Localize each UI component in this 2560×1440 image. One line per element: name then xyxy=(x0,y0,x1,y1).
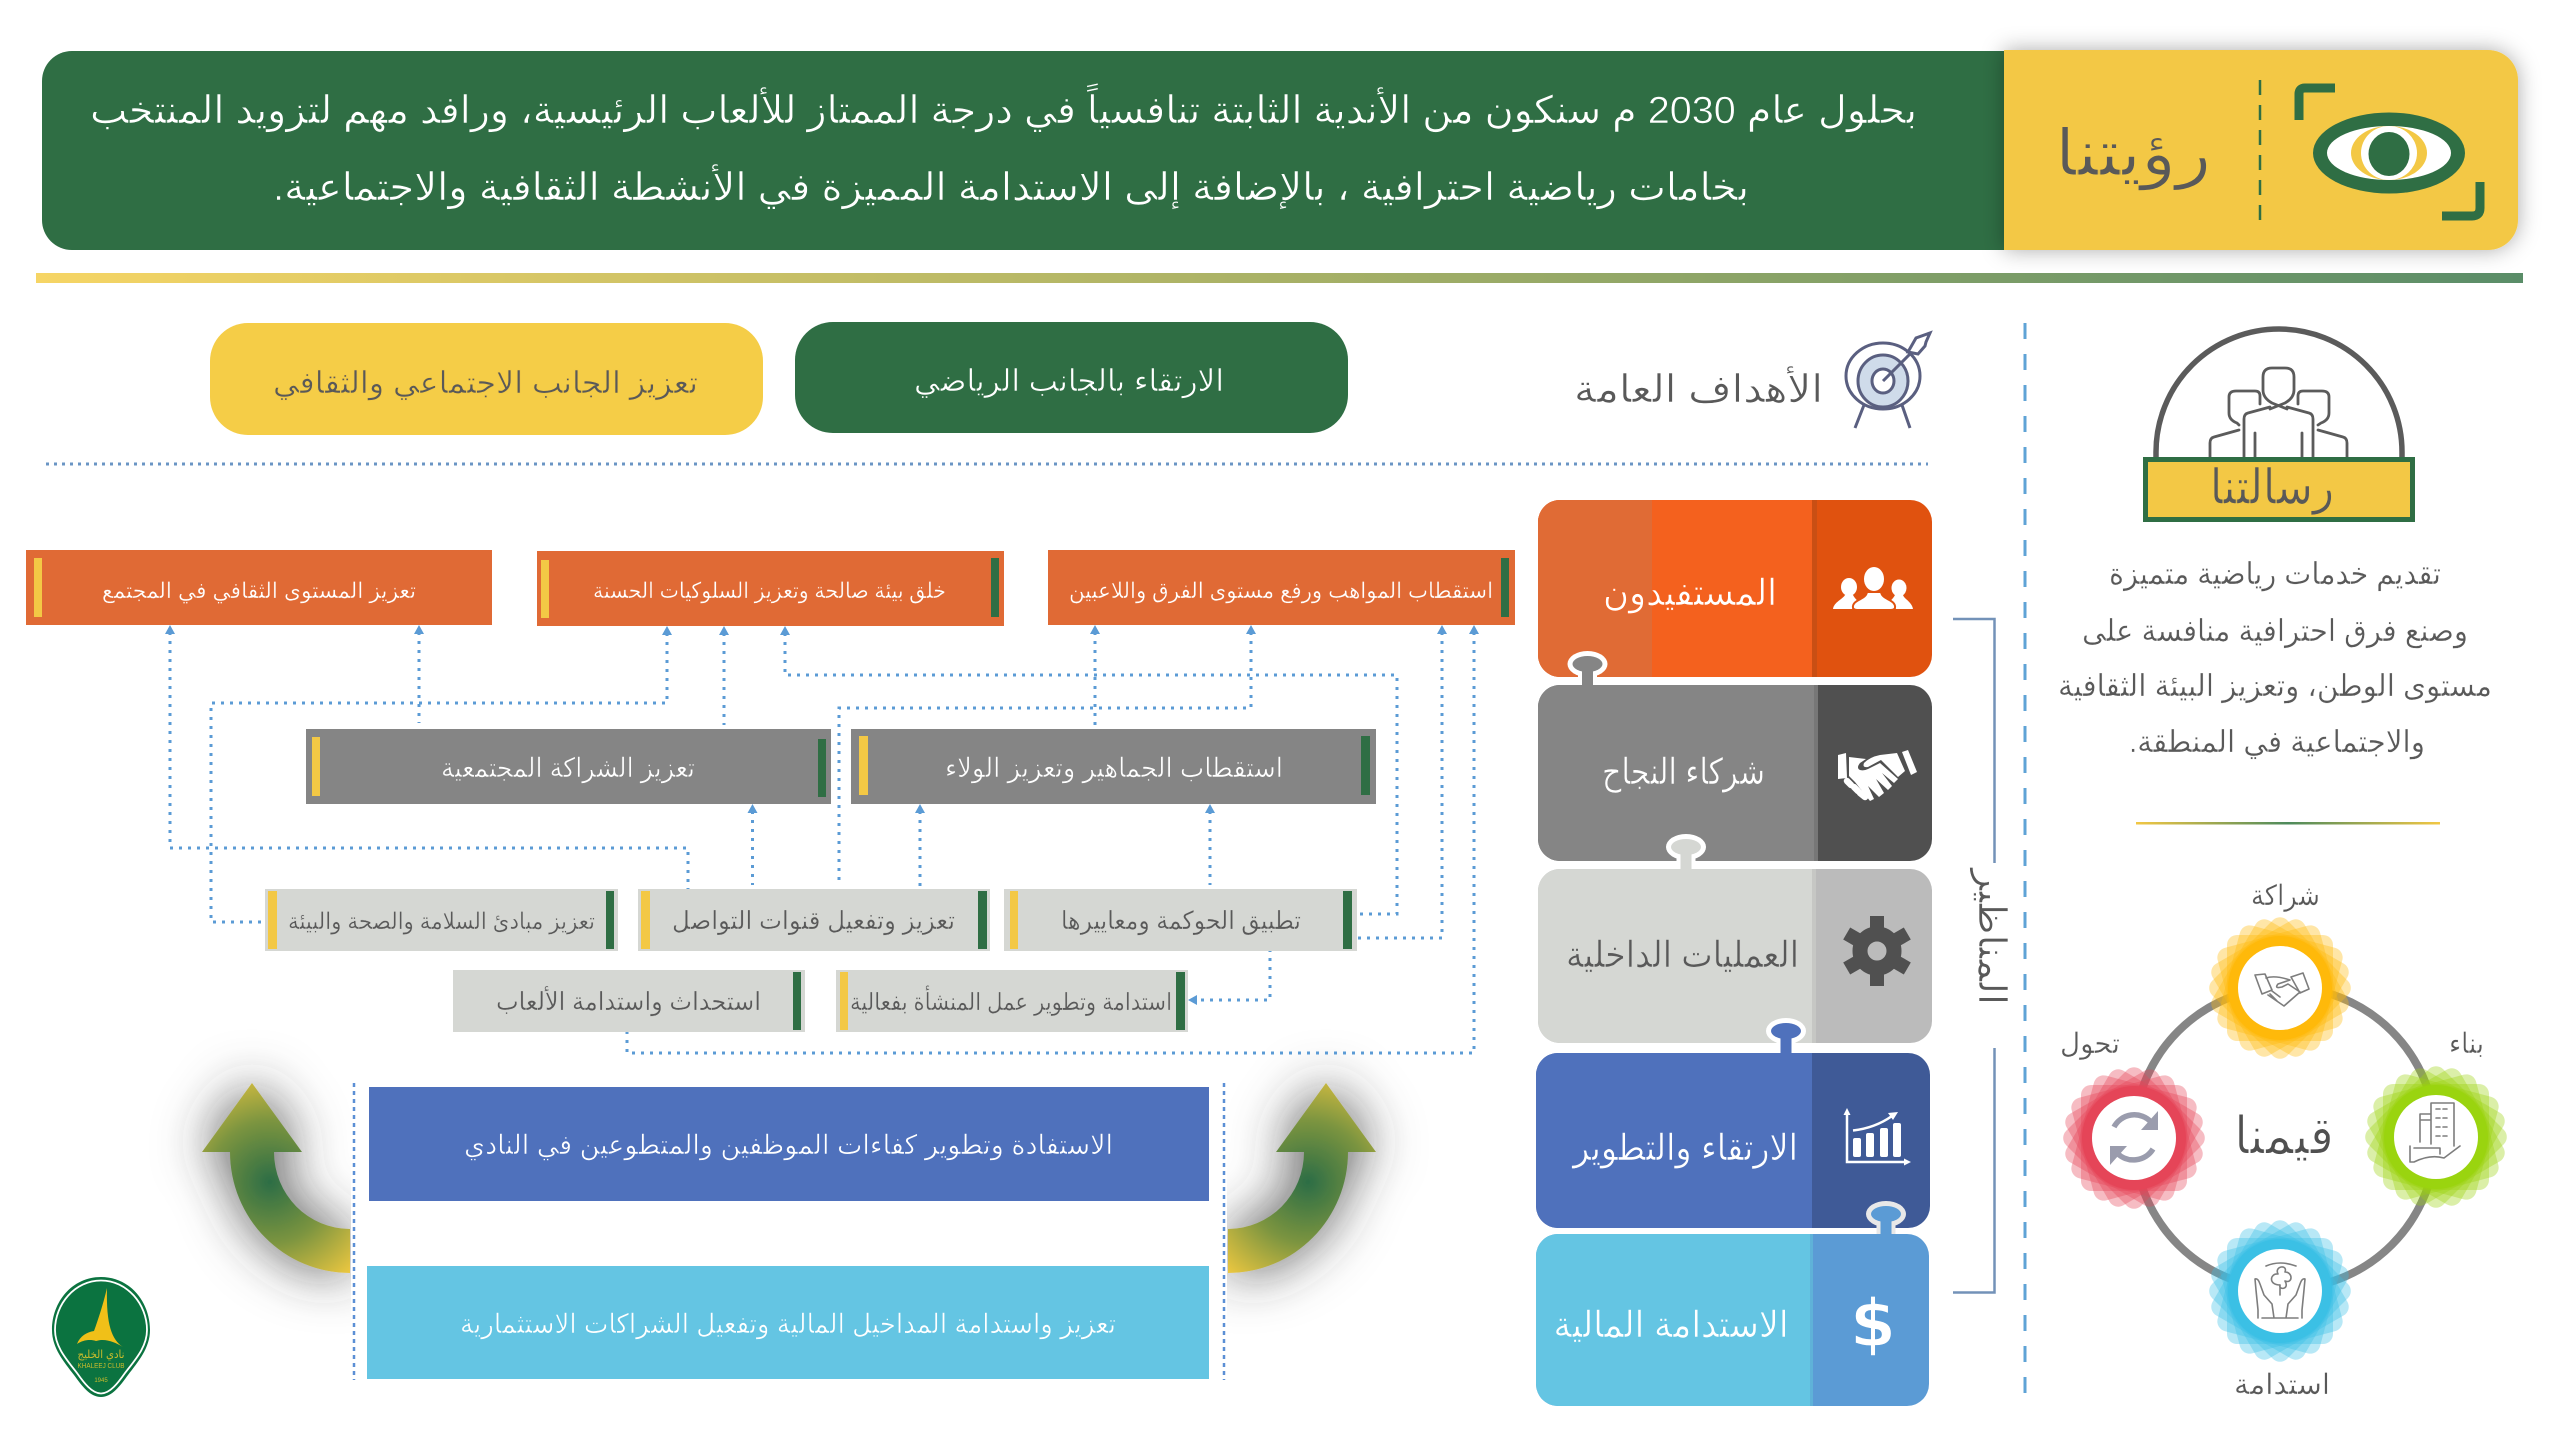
panel: general goals xyxy=(46,322,1930,464)
panel: strategic objectives xyxy=(26,550,1515,1032)
mission heading box xyxy=(2146,460,2412,520)
logo: Khaleej club: 1945 xyxy=(94,1378,108,1384)
vision statement text: بحلول عام 2030 م سنكون من الأندية الثابتة تنافسياً في درجة الممتاز للألعاب الرئيسية، ورافد مهم لتزويد المنتخب xyxy=(90,83,1917,133)
logo: Khaleej club: KHALEEJ CLUB xyxy=(78,1361,124,1370)
objective: safety: تعزيز مبادئ السلامة والصحة والبيئة xyxy=(288,908,595,935)
icon: bar chart xyxy=(1844,1108,1911,1166)
goals heading: الأهداف العامة xyxy=(1574,365,1823,411)
gradient divider bar xyxy=(36,273,2523,283)
objective: community partnership xyxy=(306,729,831,804)
panel: connector arrows xyxy=(165,625,1479,1053)
objective: new sports xyxy=(453,970,805,1032)
objective: facility: استدامة وتطوير عمل المنشأة بفعالية xyxy=(850,985,1172,1016)
values heading: قيمنا xyxy=(2234,1108,2334,1166)
enabler: financial sustainability: تعزيز واستدامة المداخيل المالية وتفعيل الشراكات الاستثمارية xyxy=(460,1309,1116,1340)
perspectives label: المناظير xyxy=(1969,867,2012,1005)
logo: Khaleej club xyxy=(52,1277,150,1397)
objective: fans and loyalty: استقطاب الجماهير وتعزيز الولاء xyxy=(945,753,1283,784)
perspective card: partners: شركاء النجاح xyxy=(1602,751,1765,793)
mission heading box: رسالتنا xyxy=(2210,462,2334,516)
vision statement text: بخامات رياضية احترافية ، بالإضافة إلى الاستدامة المميزة في الأنشطة الثقافية والاجتماعية. xyxy=(273,163,1749,210)
objective: communication channels: تعزيز وتفعيل قنوات التواصل xyxy=(672,907,955,936)
icon: handshake xyxy=(1838,750,1917,801)
mission text: مستوى الوطن، وتعزيز البيئة الثقافية xyxy=(2058,670,2492,704)
objective: talent: استقطاب المواهب ورفع مستوى الفرق واللاعبين xyxy=(1069,578,1493,603)
dashed separator xyxy=(2259,80,2261,221)
icon: eye xyxy=(2299,88,2480,216)
vision statement text xyxy=(90,83,1917,210)
objective: culture xyxy=(26,550,492,625)
dotted goals separator xyxy=(46,462,1928,466)
enabler: financial sustainability xyxy=(367,1266,1209,1379)
objective: environment and behaviour xyxy=(537,551,1004,626)
mission text: وصنع فرق احترافية منافسة على xyxy=(2082,615,2468,649)
enabler: staff development: الاستفادة وتطوير كفاءات الموظفين والمتطوعين في النادي xyxy=(464,1130,1113,1161)
enabler: staff development xyxy=(369,1087,1209,1201)
objective: communication channels xyxy=(638,889,990,951)
puzzle knob xyxy=(1666,834,1706,869)
perspective card: internal processes: العمليات الداخلية xyxy=(1566,934,1799,975)
icon: target xyxy=(1846,333,1930,428)
objective: fans and loyalty xyxy=(851,729,1376,804)
objective: governance: تطبيق الحوكمة ومعاييرها xyxy=(1061,907,1301,936)
objective: safety xyxy=(265,889,618,951)
perspective card: growth: الارتقاء والتطوير xyxy=(1571,1127,1798,1169)
values ring xyxy=(2134,987,2436,1289)
goal pill: sports: الارتقاء بالجانب الرياضي xyxy=(914,365,1224,399)
value: building xyxy=(2361,1028,2511,1212)
panel: mission xyxy=(2058,329,2492,824)
value: sustainability xyxy=(2205,1216,2355,1400)
mission text xyxy=(2058,558,2492,760)
label: building: بناء xyxy=(2449,1028,2484,1059)
panel: perspectives puzzle xyxy=(1536,500,1932,1406)
icon: handshake outline xyxy=(2255,973,2309,1006)
objective: governance xyxy=(1004,889,1357,951)
panel: enablers xyxy=(367,1087,1209,1379)
icon: refresh arrows xyxy=(2110,1111,2158,1165)
icon: hands with clover xyxy=(2255,1263,2305,1318)
label: sustainability: استدامة xyxy=(2234,1369,2330,1400)
arrow: left xyxy=(202,1083,350,1273)
label: partnership: شراكة xyxy=(2251,880,2320,912)
panel: vision banner xyxy=(42,50,2518,250)
puzzle knob xyxy=(1568,651,1608,685)
perspective card: financial: الاستدامة المالية xyxy=(1554,1304,1788,1345)
objective: culture: تعزيز المستوى الثقافي في المجتمع xyxy=(102,578,416,604)
value: transformation xyxy=(2059,1028,2209,1213)
mission text: والاجتماعية في المنطقة. xyxy=(2129,726,2425,760)
vision yellow tab xyxy=(2004,50,2518,250)
perspective card: growth xyxy=(1536,1053,1930,1234)
perspective card: financial xyxy=(1536,1234,1929,1406)
perspective card: partners xyxy=(1538,685,1932,869)
perspective card: internal processes xyxy=(1538,869,1932,1053)
icon: dollar: $ xyxy=(1850,1285,1896,1362)
panel: values xyxy=(2059,880,2511,1400)
goal pill: sports xyxy=(795,322,1348,433)
perspectives bracket xyxy=(1953,619,2012,1292)
vision heading: رؤيتنا xyxy=(2055,117,2211,191)
icon: building in hand xyxy=(2410,1103,2460,1162)
value: partnership xyxy=(2205,880,2355,1063)
perspective card: beneficiaries xyxy=(1538,500,1932,685)
puzzle knob xyxy=(1766,1018,1806,1053)
objective: new sports: استحداث واستدامة الألعاب xyxy=(496,985,761,1017)
objective: environment and behaviour: خلق بيئة صالحة وتعزيز السلوكيات الحسنة xyxy=(593,578,946,604)
mission text: تقديم خدمات رياضية متميزة xyxy=(2109,558,2441,592)
arrow: right xyxy=(1228,1083,1376,1273)
objective: talent xyxy=(1048,550,1515,625)
label: transformation: تحول xyxy=(2060,1028,2120,1060)
banner green background xyxy=(42,51,2100,250)
icon: people under dome xyxy=(2156,329,2402,457)
objective: community partnership: تعزيز الشراكة المجتمعية xyxy=(441,753,695,784)
mission divider xyxy=(2136,822,2440,824)
panel: curved arrows xyxy=(202,1083,1376,1273)
vertical dashed separator xyxy=(2024,323,2026,1400)
perspective card: beneficiaries: المستفيدون xyxy=(1603,572,1777,614)
icon: people xyxy=(1833,567,1913,610)
objective: facility xyxy=(836,970,1188,1032)
logo: Khaleej club: نادي الخليج xyxy=(78,1349,124,1361)
goal pill: social and cultural: تعزيز الجانب الاجتماعي والثقافي xyxy=(273,367,698,401)
icon: gear xyxy=(1843,916,1911,986)
goal pill: social and cultural xyxy=(210,323,763,435)
puzzle knob xyxy=(1866,1201,1906,1234)
